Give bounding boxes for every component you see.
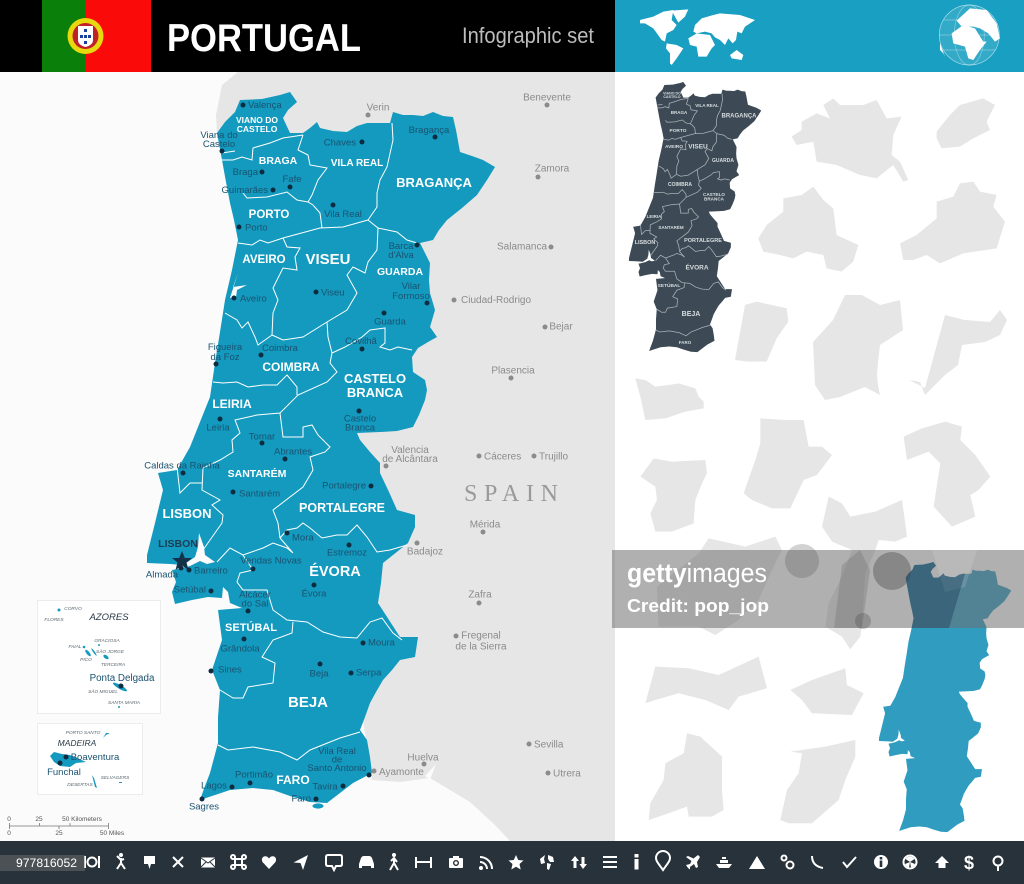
city: Portalegre: Portalegre (322, 480, 366, 492)
panel: grey region silhouettes, upper group (735, 98, 1005, 362)
city: Setúbal: Setúbal (174, 584, 206, 596)
city: Huelva: Huelva (407, 752, 439, 764)
city: Fregenal de la Sierra: de la Sierra (455, 642, 507, 652)
dark map labels: SANTARÉM (658, 223, 684, 230)
city: Viana do Castelo: Castelo (203, 139, 235, 150)
label: Viano do Castelo: VIANO DO (236, 115, 278, 125)
city: Tavira: Tavira (312, 782, 338, 792)
city: Barca d'Alva: Barca (389, 241, 413, 252)
city: Ciudad-Rodrigo: Ciudad-Rodrigo (461, 295, 531, 306)
Aveiro lagoon (230, 273, 247, 298)
city: Sines: Sines (218, 664, 242, 676)
icon: gears (782, 856, 794, 868)
icon: menu lines (603, 857, 617, 867)
city: Valença: Valença (248, 100, 282, 111)
icon: heart (262, 856, 276, 869)
city: Viana do Castelo: Viana do (200, 130, 238, 141)
city: Valencia de Alcântara: de Alcântara (382, 454, 438, 465)
city: Sagres (189, 796, 219, 812)
city: Beja: Beja (309, 668, 329, 680)
Azores labels: GRACIOSA (94, 638, 120, 644)
icon: phone (812, 856, 823, 868)
Azores labels: SANTA MARIA (108, 700, 140, 706)
city: Vila Real de Santo Antonio (307, 746, 372, 778)
Madeira labels: DESERTAS (67, 782, 94, 788)
icon: plane (686, 855, 700, 870)
icon: radiation (904, 856, 916, 868)
city: Grândola: Grândola (220, 644, 260, 654)
city: Almada: Almada (146, 570, 179, 580)
watermark brand: gettyimages (627, 558, 767, 588)
region labels (162, 115, 473, 787)
icon: navigation arrow (294, 855, 308, 870)
city: Guarda (374, 310, 407, 328)
city: Abrantes: Abrantes (274, 446, 312, 458)
Azores labels: Ponta Delgada (90, 673, 155, 684)
scale bar: 25 (55, 830, 63, 837)
dark map labels: BRANCA (704, 196, 725, 202)
Azores islands (58, 608, 128, 708)
city: Alcácer do Sal: do Sal (242, 598, 268, 610)
icon: envelope (201, 858, 215, 868)
silhouette: Guarda (813, 295, 903, 400)
icon: map pin (656, 851, 670, 870)
city: Vendas Novas: Vendas Novas (240, 556, 302, 566)
city: Zafra (468, 590, 492, 606)
city: Sevilla: Sevilla (534, 740, 564, 750)
panel: Azores inset (38, 600, 160, 714)
city: Moura: Moura (368, 638, 396, 648)
city: Castelo Branca (344, 408, 376, 434)
dark map labels: VILA REAL (695, 103, 719, 108)
capital: Lisbon star and label (158, 538, 198, 570)
city: Zafra: Zafra (468, 590, 492, 600)
city: Ayamonte: Ayamonte (379, 767, 424, 778)
subtitle: Infographic set (462, 23, 594, 48)
footer bar with icons (0, 841, 1024, 884)
silhouette: Viseu (900, 182, 1005, 263)
city: Benevente: Benevente (523, 92, 571, 104)
city: Mérida: Mérida (470, 520, 501, 530)
city: Estremoz (327, 542, 367, 558)
dark map labels: VISEU (688, 144, 708, 150)
city: Alcácer do Sal: Alcácer (239, 590, 271, 600)
Azores labels (44, 606, 155, 706)
city: Lagos: Lagos (201, 780, 227, 792)
city: Braga: Braga (233, 167, 259, 178)
Guadiana notch (425, 764, 436, 780)
city: Vila Real: Vila Real (324, 209, 362, 220)
city: Coimbra (258, 343, 299, 358)
icon: globe (939, 5, 1000, 65)
city: Vila Real (324, 202, 362, 220)
city: Fafe: Fafe (282, 174, 302, 185)
scale bar: 0 (7, 830, 11, 837)
city markers in Portugal (144, 100, 450, 812)
title: PORTUGAL (167, 17, 361, 60)
watermark credit: Credit: pop_jop (627, 596, 769, 616)
scale bar: 50 Kilometers (62, 816, 103, 823)
silhouette: Vila Real (758, 187, 858, 272)
city: Tomar: Tomar (249, 432, 275, 442)
city: Évora: Évora (302, 588, 327, 600)
icon: camera (449, 856, 463, 868)
city: Vila Real de Santo Antonio: Santo Antonio (307, 763, 367, 774)
silhouette: Porto (635, 378, 704, 420)
city: Caldas da Rainha: Caldas da Rainha (144, 460, 220, 472)
Azores labels: FLORES (44, 617, 64, 623)
city: Figueira da Foz: Figueira (208, 342, 242, 353)
label: Guarda: GUARDA (377, 266, 423, 278)
silhouette: Santarém (790, 668, 864, 715)
panel: main map of Portugal (144, 92, 581, 812)
city: Fregenal de la Sierra (454, 630, 507, 652)
Portugal landmass (147, 92, 495, 803)
label: Porto: PORTO (249, 209, 289, 221)
city: Leiria: Leiria (206, 422, 230, 434)
dark map labels: GUARDA (712, 158, 734, 164)
dark map labels: CASTELO (703, 192, 725, 197)
city: Vilar Formoso: Vilar (402, 281, 420, 292)
city: Vila Real de Santo Antonio: de (332, 754, 342, 766)
icon: command key (231, 855, 246, 869)
city: Grândola (220, 636, 260, 654)
dark map labels (635, 92, 757, 345)
city: Badajoz (407, 540, 443, 558)
silhouette: Faro (645, 657, 767, 710)
city: Cáceres: Cáceres (484, 452, 521, 462)
silhouette: Castelo Branca (744, 418, 832, 508)
city: Verin (366, 102, 389, 118)
icon: reception person (117, 853, 125, 869)
Madeira labels: PORTO SANTO (66, 730, 101, 736)
dark map labels: FARO (679, 340, 692, 345)
city: Valencia de Alcântara: Valencia (391, 445, 429, 456)
city: Figueira da Foz: da Foz (210, 352, 240, 363)
city: Badajoz: Badajoz (407, 546, 443, 558)
dark map shape (629, 82, 761, 352)
icon: info i (634, 854, 638, 870)
Azores labels: PICO (80, 657, 92, 663)
silhouette: Setúbal (904, 422, 990, 527)
city: Salamanca: Salamanca (497, 242, 547, 252)
label: Viano do Castelo: CASTELO (237, 124, 278, 134)
city: Vilar Formoso (392, 281, 430, 306)
city: Serpa: Serpa (356, 668, 382, 678)
city: Plasencia: Plasencia (491, 366, 535, 376)
label: Santarém: SANTARÉM (228, 467, 287, 480)
city: Guimarães: Guimarães (222, 185, 268, 196)
silhouette: Leiria (640, 458, 707, 532)
label: Coimbra: COIMBRA (262, 360, 320, 374)
scale bar (7, 816, 125, 837)
Azores labels: AZORES (88, 612, 129, 623)
Azores labels: CORVO (64, 606, 82, 612)
dark map labels: COIMBRA (668, 182, 692, 188)
scale bar: 25 (35, 816, 43, 823)
label: Vila Real: VILA REAL (331, 158, 383, 169)
icon: walking person (390, 853, 398, 870)
icon: star (508, 855, 524, 870)
label: Bragança: BRAGANÇA (396, 175, 473, 190)
Azores labels: SÃO MIGUEL (88, 688, 118, 695)
Madeira labels: Funchal (47, 767, 81, 778)
label: Castelo Branca: BRANCA (347, 385, 404, 400)
dark map labels: BRAGA (671, 110, 688, 115)
city: Portimão: Portimão (235, 770, 273, 780)
city: Mora (284, 530, 314, 544)
icon: bed (416, 857, 431, 868)
panel: grey region silhouettes, lower group (635, 378, 990, 823)
city: Vila Real de Santo Antonio: Vila Real (318, 746, 356, 757)
sea background of main map (0, 72, 615, 842)
dark map labels: PORTALEGRE (684, 238, 722, 244)
panel: blue silhouette of Portugal (879, 562, 1011, 832)
icon: rss (479, 857, 492, 870)
label: Setúbal: SETÚBAL (225, 621, 277, 634)
country label: Spain: SPAIN (464, 481, 558, 507)
Ponta Delgada marker (118, 684, 124, 688)
Madeira labels: SELVAGERS (101, 775, 130, 781)
icon: up arrow (935, 856, 949, 868)
city: Porto: Porto (245, 222, 268, 234)
dark map labels: LEIRIA (647, 214, 662, 219)
city: Verin: Verin (367, 102, 389, 114)
scale bar: 50 Miles (100, 830, 125, 837)
header: right blue band (615, 0, 1024, 72)
dark map labels: SETÚBAL (658, 282, 680, 289)
panel: dark political map (629, 82, 761, 352)
Faro islands (312, 803, 324, 809)
city: Barreiro: Barreiro (194, 566, 228, 576)
label: Viseu: VISEU (305, 251, 351, 268)
city: Mora: Mora (292, 532, 314, 544)
city: Coimbra: Coimbra (262, 343, 299, 354)
dark map labels: BEJA (682, 311, 700, 318)
dark map labels: VIANO DO (663, 92, 681, 96)
Spain land mass (216, 72, 615, 841)
city: Almada (146, 566, 184, 580)
city: Viseu: Viseu (321, 288, 345, 298)
flag of Portugal (42, 0, 151, 72)
label: Portalegre: PORTALEGRE (299, 501, 385, 515)
city: Castelo Branca: Branca (345, 422, 376, 434)
icon: ship (716, 857, 732, 868)
silhouette: Lisbon (657, 537, 782, 635)
label: Lisbon region: LISBON (162, 506, 212, 521)
icon: car (359, 856, 374, 868)
city: Bejar: Bejar (549, 322, 573, 332)
city: Vendas Novas (240, 556, 302, 572)
footer icons row (85, 851, 1002, 873)
watermark overlay shapes (785, 544, 976, 629)
Azores labels: TERCEIRA (101, 662, 125, 668)
city: Sagres: Sagres (189, 802, 219, 812)
Madeira markers (58, 754, 68, 766)
city: Valencia de Alcântara (382, 445, 438, 468)
capital: Lisbon star and label: LISBON (158, 538, 198, 550)
dark map labels: BRAGANÇA (722, 114, 757, 120)
icon: sign (144, 856, 155, 869)
dark map labels: CASTELO (663, 95, 681, 99)
icon: speech bubble (326, 855, 342, 870)
silhouette: Beja (780, 740, 855, 823)
dark map labels: PORTO (670, 128, 687, 134)
city: Barca d'Alva (388, 241, 420, 261)
city markers in Spain (366, 92, 581, 780)
silhouette: Aveiro (735, 302, 788, 362)
city: Figueira da Foz (208, 342, 243, 366)
city: Covilhã: Covilhã (345, 336, 378, 347)
city: Viana do Castelo (200, 130, 238, 154)
city: Évora (302, 582, 327, 600)
dark map labels: LISBON (635, 240, 655, 246)
label: Beja: BEJA (288, 694, 328, 711)
icon: world map (640, 9, 755, 65)
label: Faro: FARO (276, 773, 310, 787)
city: Zamora: Zamora (535, 164, 570, 174)
city: Santarém: Santarém (239, 488, 280, 500)
scale bar: 0 (7, 816, 11, 823)
silhouette: Portalegre (822, 497, 907, 649)
label: Castelo Branca: CASTELO (344, 371, 406, 386)
Madeira labels: Boaventura (71, 752, 120, 763)
city: Castelo Branca: Castelo (344, 414, 376, 424)
city: Guarda: Guarda (374, 316, 407, 328)
city: Barca d'Alva: d'Alva (388, 250, 415, 261)
city: Portimão (235, 770, 273, 786)
silhouette: Bragança (792, 98, 908, 182)
label: Leiria: LEIRIA (212, 397, 252, 411)
city: Covilhã (345, 336, 378, 352)
city: Zamora (535, 164, 570, 180)
city: Bragança: Bragança (409, 125, 450, 136)
header: left black band (0, 0, 615, 72)
icon: info circle (874, 855, 888, 869)
watermark band (612, 544, 1024, 629)
Azores labels: SÃO JORGE (96, 648, 125, 655)
icon: dining (85, 856, 99, 868)
Madeira labels (47, 730, 130, 788)
region boundaries (177, 123, 417, 760)
city: Vilar Formoso: Formoso (392, 291, 430, 302)
silhouette: Coimbra (909, 310, 1007, 395)
Madeira islands (50, 733, 122, 788)
icon: lollipop pin (994, 856, 1002, 871)
silhouette: Évora (649, 733, 724, 820)
city: Leiria (206, 416, 230, 434)
Azores labels: FAIAL (69, 644, 82, 650)
icon: up-down arrows (571, 856, 587, 869)
panel: Madeira inset (38, 724, 142, 794)
icon: globe fragments (540, 855, 554, 870)
city: Chaves: Chaves (324, 138, 356, 148)
dark map labels: ÉVORA (685, 262, 709, 272)
city: Aveiro: Aveiro (240, 294, 267, 304)
silhouette: Viano do Castelo (937, 98, 995, 148)
city: Estremoz: Estremoz (327, 548, 367, 558)
city: Utrera: Utrera (553, 768, 581, 780)
Madeira labels: MADEIRA (58, 738, 97, 748)
city: Beja (309, 662, 329, 680)
label: Évora: ÉVORA (309, 563, 361, 580)
icon: tent (749, 856, 765, 869)
stock image id stamp (0, 855, 85, 871)
label: Aveiro: AVEIRO (242, 254, 286, 266)
stock image id stamp: 977816052 (16, 858, 77, 870)
icon: dollar: $ (964, 853, 974, 873)
city: Alcácer do Sal (239, 590, 271, 614)
city: Faro: Faro (291, 794, 311, 804)
icon: check mark (843, 857, 856, 867)
icon: cross (173, 857, 183, 867)
label: Braga: BRAGA (259, 155, 298, 167)
city: Trujillo: Trujillo (539, 452, 569, 462)
dark map labels: AVEIRO (665, 144, 683, 150)
city: Fregenal de la Sierra: Fregenal (461, 630, 501, 642)
